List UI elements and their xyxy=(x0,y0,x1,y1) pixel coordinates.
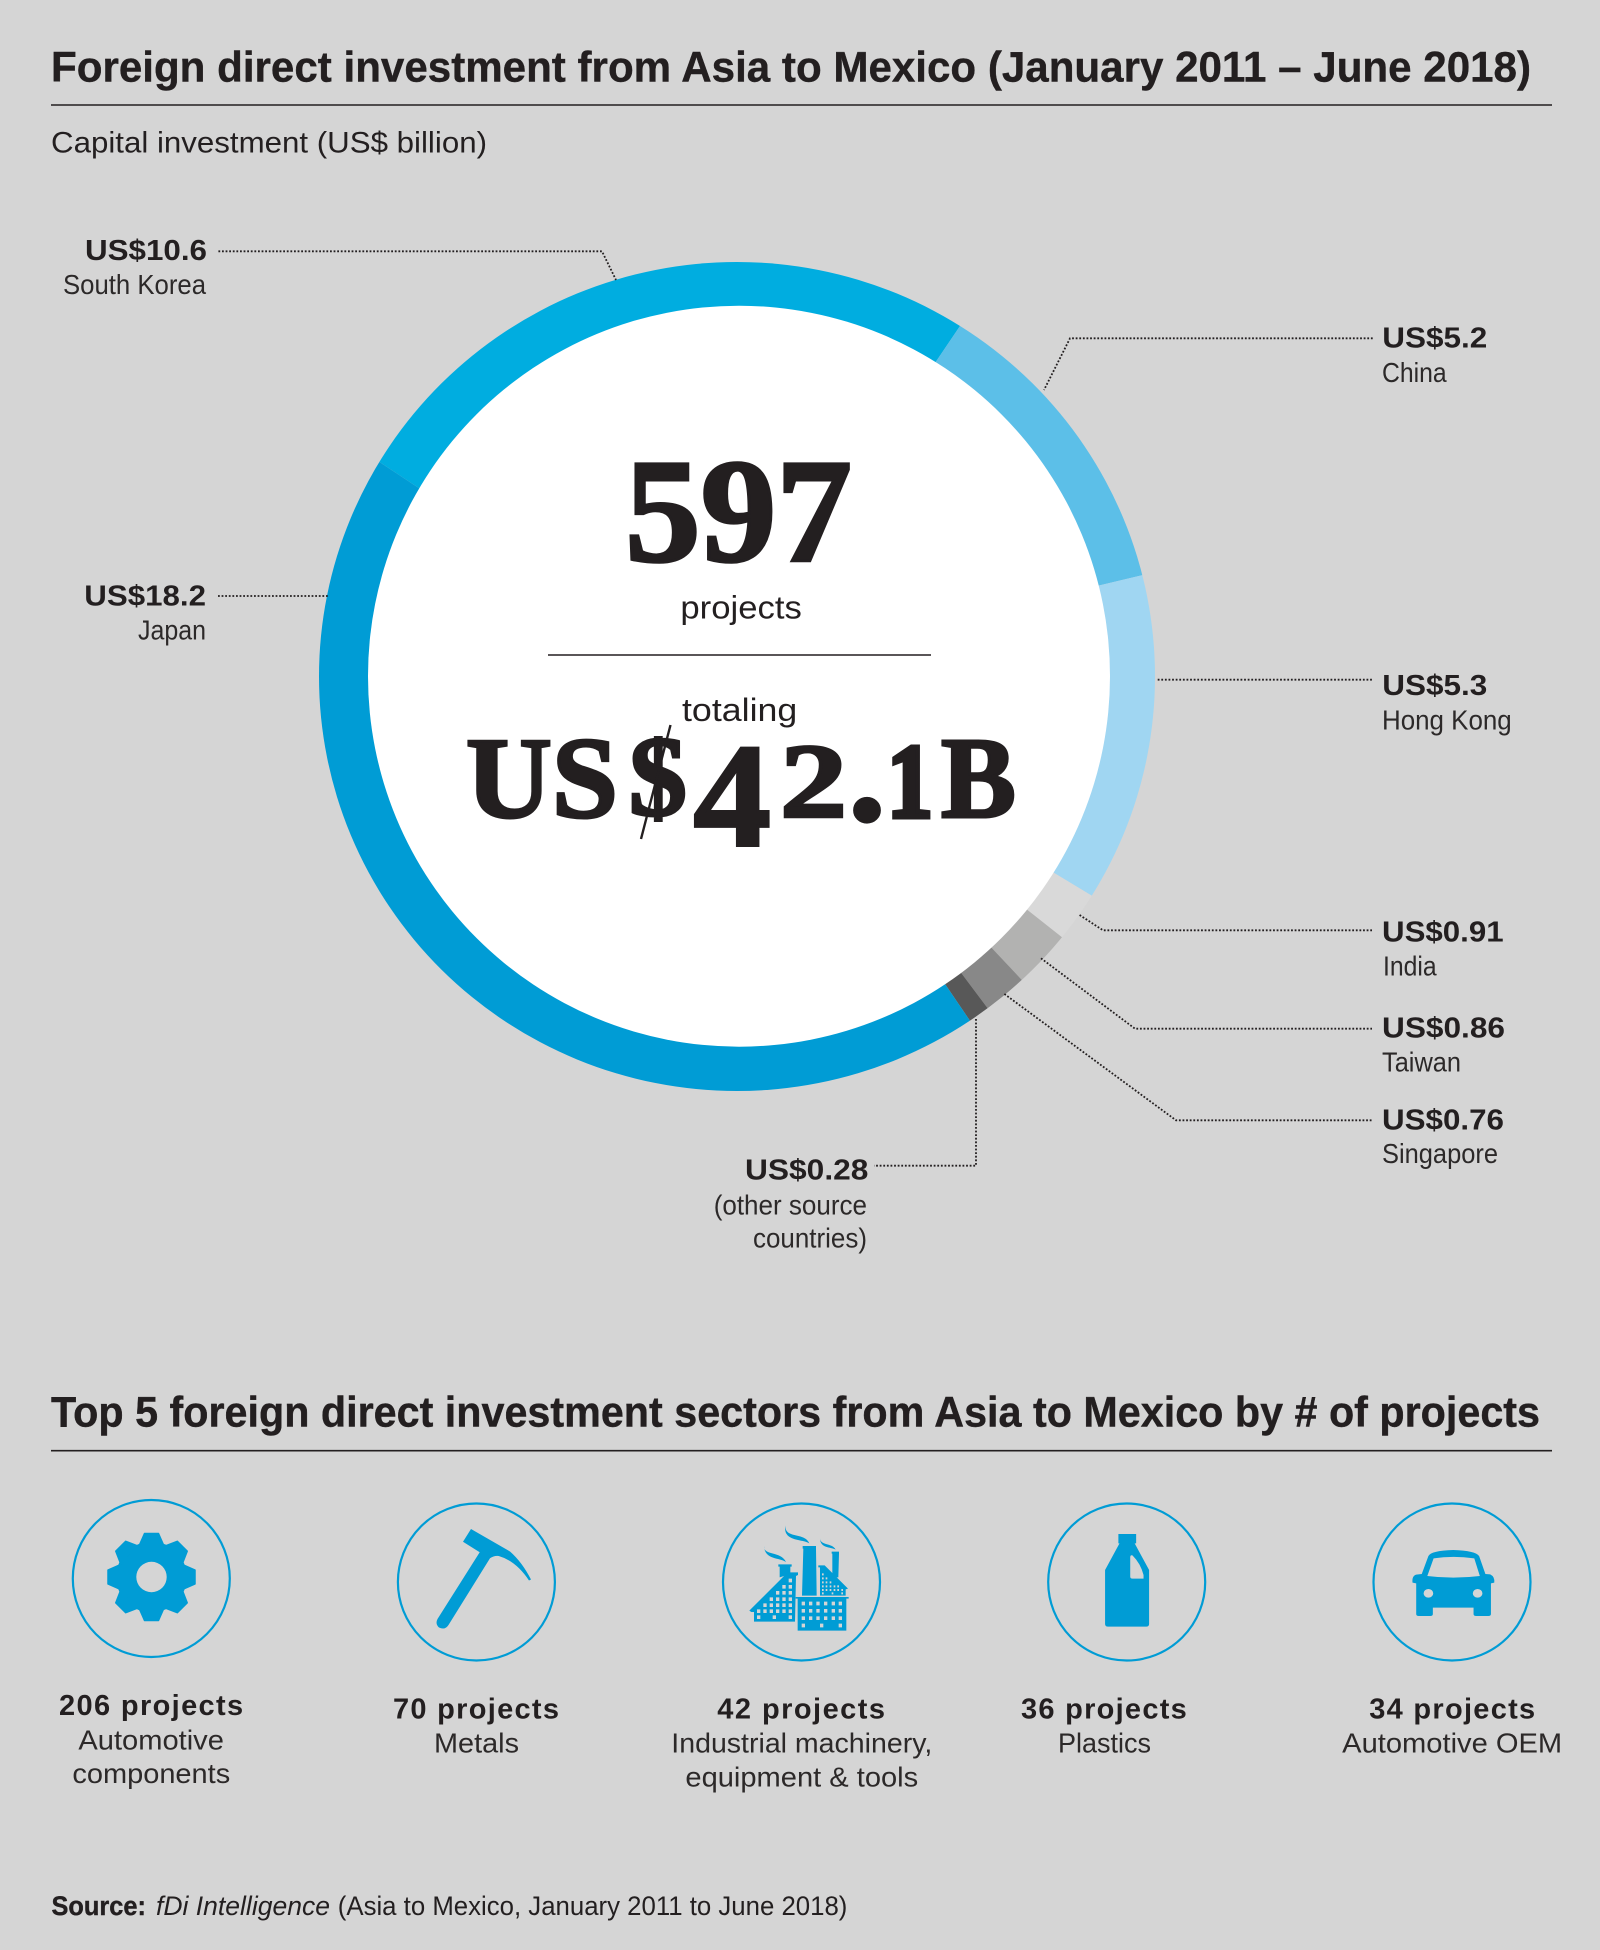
label: Hong Kong: US$5.3 xyxy=(1382,670,1487,702)
sector text xyxy=(671,1693,932,1793)
sector: plastics xyxy=(1021,1504,1205,1759)
sector text xyxy=(59,1690,243,1789)
sector text: equipment & tools xyxy=(685,1762,918,1793)
label: India xyxy=(1080,915,1504,982)
donut chart xyxy=(319,262,1155,1091)
big value: US$42.1B: 2 xyxy=(780,723,847,840)
label: other source countries: (other source xyxy=(714,1189,867,1220)
big value: US$42.1B xyxy=(467,724,1014,847)
sector text: components xyxy=(72,1758,230,1789)
centre text xyxy=(467,461,1014,847)
label: China: US$5.2 xyxy=(1382,323,1487,355)
label: Taiwan xyxy=(1041,958,1505,1078)
label: India: India xyxy=(1383,951,1437,982)
sector: industrial machinery xyxy=(671,1504,932,1793)
big value: US$42.1B: 4 xyxy=(693,714,771,878)
big value: US$42.1B: 1 xyxy=(887,723,933,840)
label: China xyxy=(1044,323,1487,390)
icon: pickaxe xyxy=(437,1529,531,1629)
segment: Hong Kong xyxy=(1054,575,1155,896)
big value: US$42.1B: US xyxy=(466,715,618,842)
label: other source countries xyxy=(714,1019,976,1254)
sector text: Automotive OEM xyxy=(1342,1728,1562,1759)
label: Singapore: US$0.76 xyxy=(1382,1104,1504,1136)
sector: automotive components xyxy=(59,1500,243,1789)
sector text: Automotive xyxy=(78,1724,224,1755)
label: South Korea: US$10.6 xyxy=(85,235,207,267)
label: China: China xyxy=(1382,357,1447,388)
sector text: 34 projects xyxy=(1369,1693,1535,1725)
segment: India xyxy=(1054,872,1092,896)
section heading: Top 5 foreign direct investment sectors from Asia to Mexico by # of projects xyxy=(51,1389,1540,1437)
segment: Singapore xyxy=(961,948,1022,1008)
title: Foreign direct investment from Asia to Mexico (January 2011 – June 2018) xyxy=(51,44,1531,92)
source note: (Asia to Mexico, January 2011 to June 2018) xyxy=(338,1891,847,1921)
segment: Taiwan xyxy=(992,910,1062,980)
sector text: 36 projects xyxy=(1021,1693,1187,1725)
sector text: 42 projects xyxy=(717,1693,885,1725)
label: Japan: Japan xyxy=(138,614,206,645)
sector text: Plastics xyxy=(1058,1728,1151,1759)
sector text: Metals xyxy=(434,1728,519,1759)
big value: US$42.1B: $ xyxy=(629,713,687,840)
label: other source countries: countries) xyxy=(753,1223,867,1254)
donut centre xyxy=(368,306,1110,1047)
label: Japan: US$18.2 xyxy=(84,580,206,612)
label: Hong Kong xyxy=(1158,670,1512,735)
segment: South Korea xyxy=(379,262,960,488)
label: India: US$0.91 xyxy=(1382,917,1504,949)
label: Taiwan: US$0.86 xyxy=(1382,1013,1505,1045)
subtitle: Capital investment (US$ billion) xyxy=(51,127,487,160)
sector text: 206 projects xyxy=(59,1690,243,1722)
segment: China xyxy=(936,326,1142,586)
label: South Korea: South Korea xyxy=(63,269,206,300)
label: Taiwan: Taiwan xyxy=(1382,1047,1461,1078)
big number: 597: 597 xyxy=(625,430,852,594)
big value: US$42.1B: . xyxy=(848,690,886,852)
big value: US$42.1B: B xyxy=(941,715,1016,842)
sector text xyxy=(1021,1693,1187,1759)
label: Singapore: Singapore xyxy=(1382,1138,1498,1169)
projects label: projects xyxy=(680,589,802,625)
icon: factory xyxy=(749,1525,849,1631)
label: Japan xyxy=(84,580,328,645)
label: other source countries: US$0.28 xyxy=(745,1154,868,1186)
icon: gear xyxy=(108,1534,195,1620)
source note: Source: xyxy=(52,1891,146,1921)
sector text xyxy=(1342,1693,1562,1759)
label: South Korea xyxy=(63,235,616,300)
label: Hong Kong: Hong Kong xyxy=(1382,704,1512,735)
source note xyxy=(52,1891,847,1921)
icon: car xyxy=(1412,1550,1494,1616)
source note: fDi Intelligence xyxy=(156,1891,330,1921)
totaling label: totaling xyxy=(682,692,797,728)
sector text: 70 projects xyxy=(393,1693,559,1725)
segment: Japan xyxy=(319,462,970,1091)
segment: other source countries xyxy=(945,973,988,1020)
sector text xyxy=(393,1693,559,1759)
icon: bottle xyxy=(1105,1534,1149,1627)
sector text: Industrial machinery, xyxy=(671,1728,932,1759)
label: Singapore xyxy=(1004,994,1504,1169)
sector: metals xyxy=(393,1504,559,1759)
sector: automotive OEM xyxy=(1342,1504,1562,1759)
